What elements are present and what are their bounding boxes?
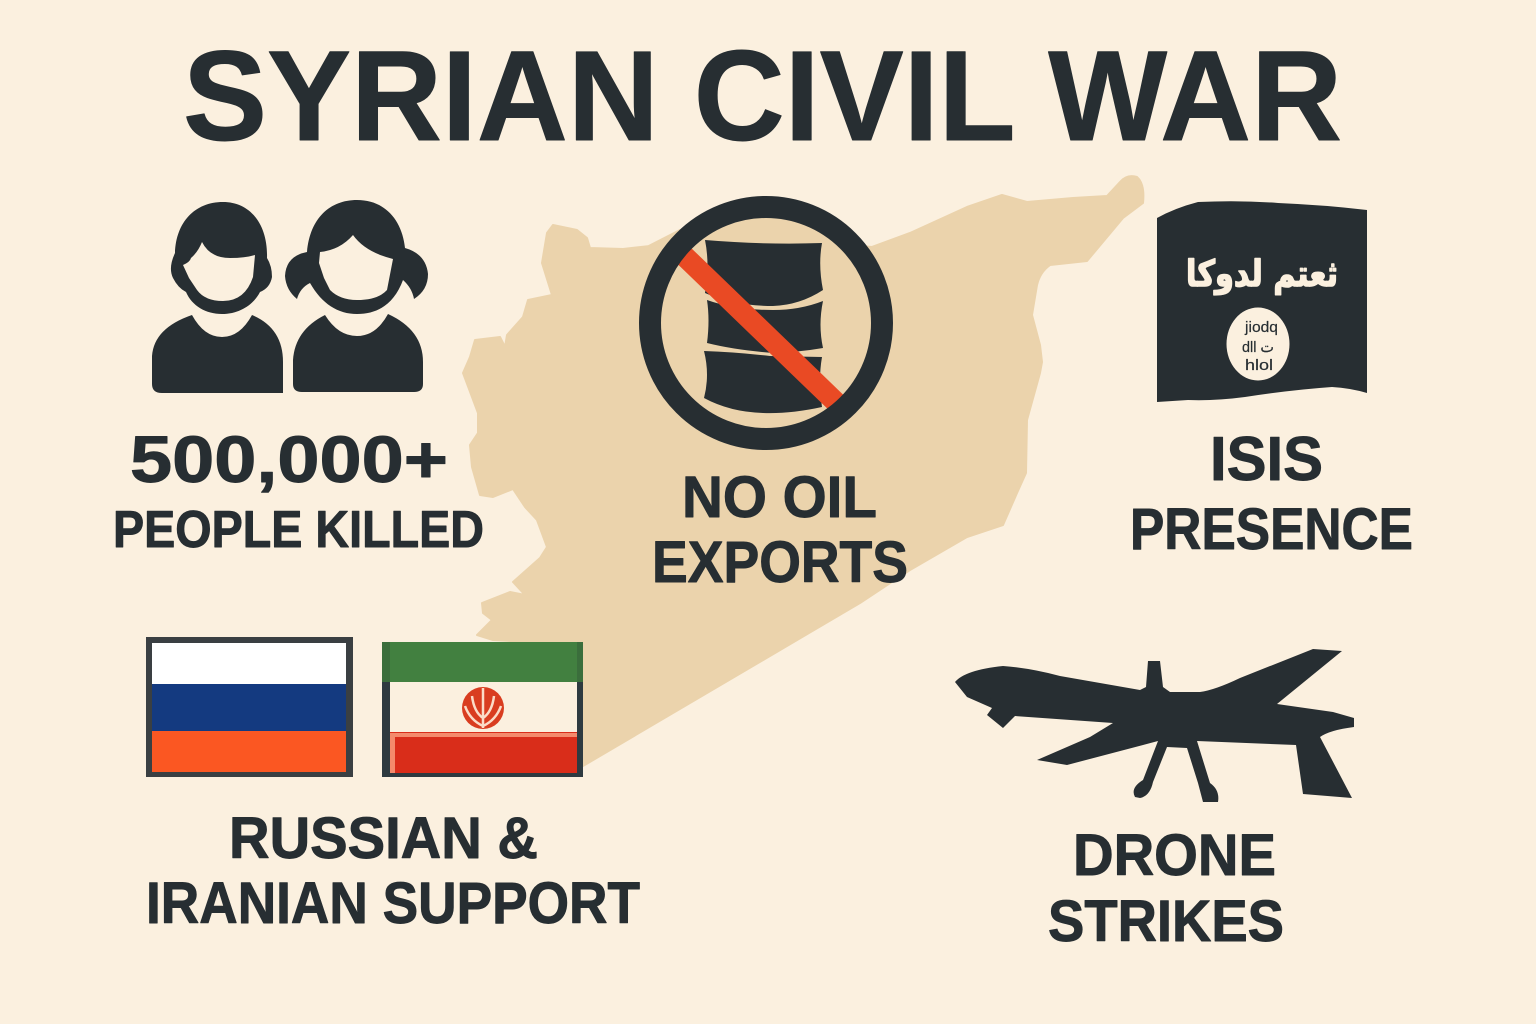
icon: Russian flag	[146, 637, 353, 777]
icon: no oil barrel	[650, 207, 882, 439]
number: 500,000+: 500,000+	[130, 422, 448, 496]
label: drone strikes: STRIKES	[1048, 889, 1284, 954]
label: Russian and Iranian support: IRANIAN SUPPORT	[146, 871, 640, 936]
label: Russian and Iranian support: RUSSIAN &	[229, 806, 538, 871]
label: no oil exports	[652, 465, 908, 595]
label: drone strikes: DRONE	[1073, 823, 1276, 888]
icon: two people	[152, 200, 428, 393]
panel: drones	[955, 649, 1354, 954]
icon: drone	[955, 649, 1354, 802]
icon: ISIS flag: dll ت	[1242, 339, 1274, 356]
icon: ISIS flag: hlol	[1245, 357, 1273, 374]
panel: oil	[650, 207, 908, 595]
label: drone strikes	[1048, 823, 1284, 954]
label: ISIS presence: PRESENCE	[1130, 497, 1413, 562]
map of Syria	[463, 176, 1143, 766]
label: ISIS presence: ISIS	[1210, 425, 1323, 494]
label: no oil exports: NO OIL	[682, 465, 877, 530]
icon: Iranian flag	[382, 642, 583, 777]
title: SYRIAN CIVIL WAR	[183, 25, 1342, 168]
label: no oil exports: EXPORTS	[652, 530, 908, 595]
panel: support	[146, 637, 640, 936]
icon: ISIS flag: jiodq	[1244, 319, 1278, 336]
label: Russian and Iranian support	[146, 806, 640, 936]
label: people killed: PEOPLE KILLED	[113, 501, 484, 559]
panel: ISIS	[1130, 201, 1413, 562]
icon: ISIS flag: ثعتم لدوكا	[1186, 254, 1338, 295]
panel: casualties	[113, 200, 484, 559]
icon: ISIS flag	[1157, 201, 1367, 402]
label: ISIS presence	[1130, 425, 1413, 562]
